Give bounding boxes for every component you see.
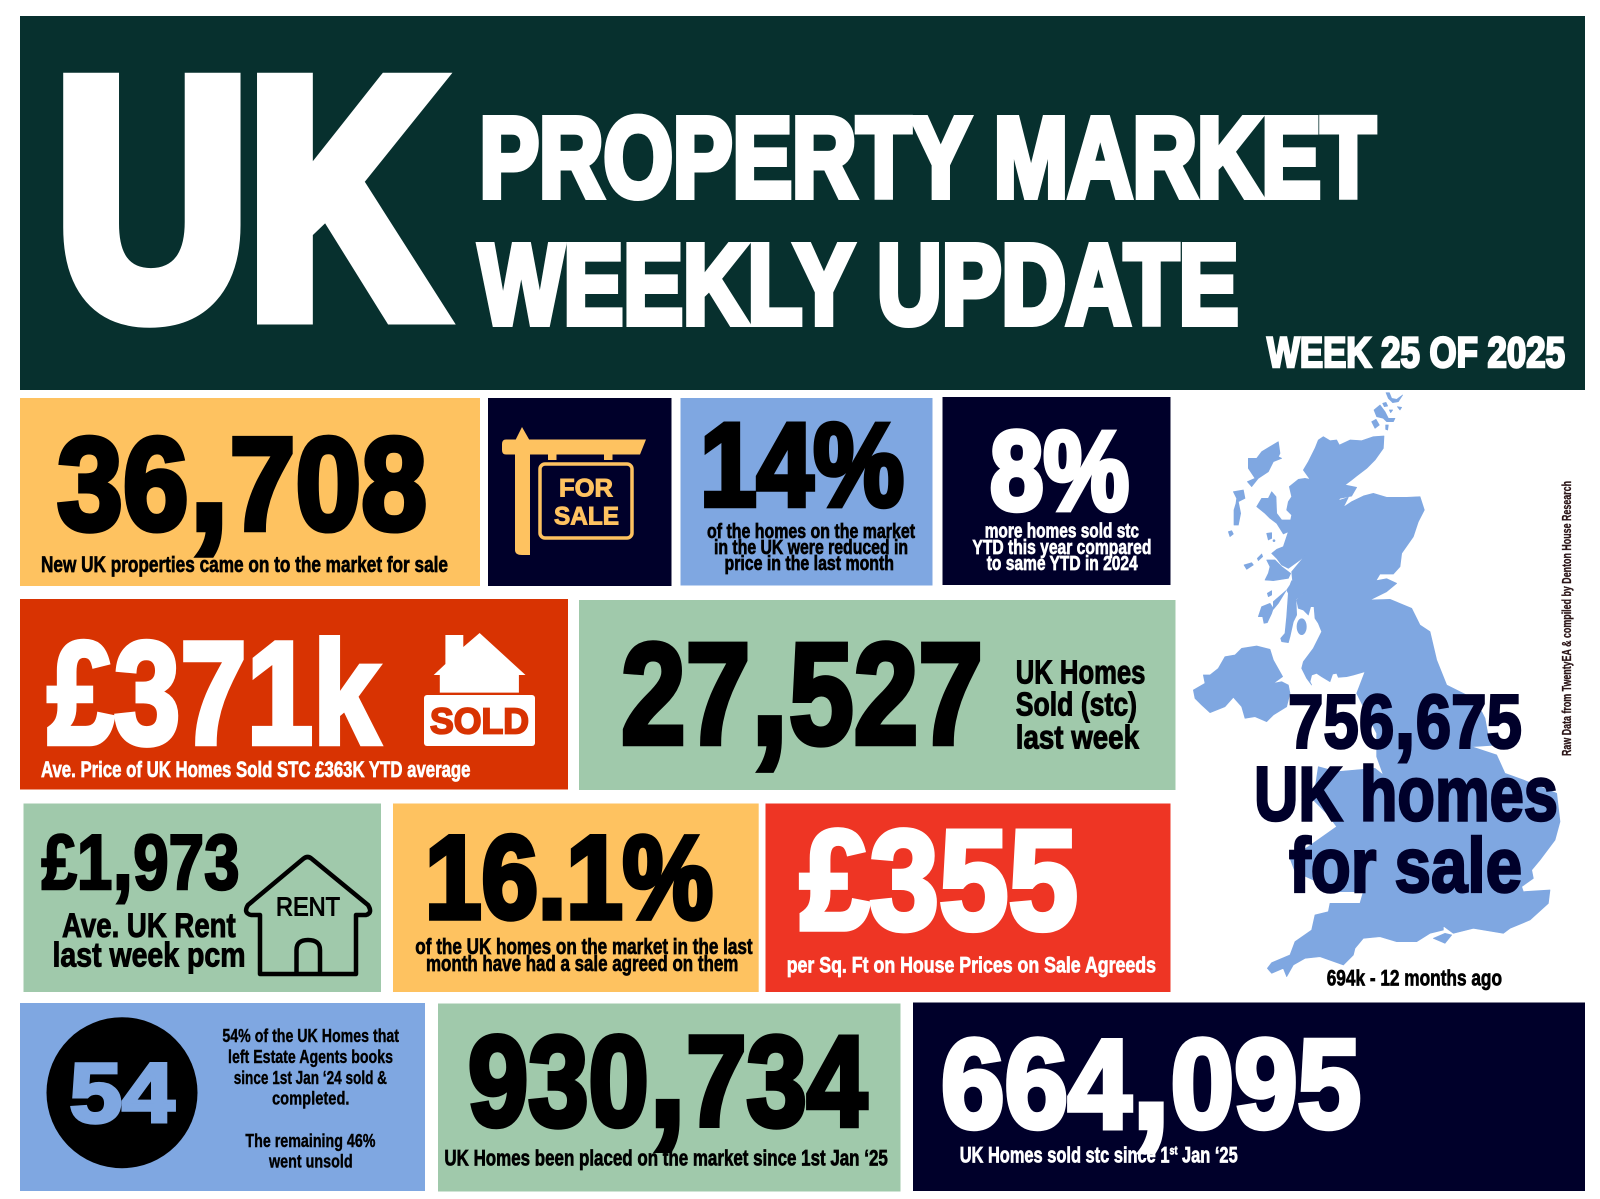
panel: homes placed on market [438, 980, 900, 1192]
icon: for sale sign [502, 427, 646, 555]
caption: Ave. UK Rent [62, 907, 236, 945]
number: £1,973: £1,973 [42, 807, 240, 909]
number: 8%: 8% [990, 408, 1129, 534]
caption: Jan ‘25 [1177, 1143, 1238, 1168]
panel: 54 percent completed [20, 1003, 425, 1191]
title: property market: PROPERTY MARKET [480, 94, 1376, 220]
body text: left Estate Agents books [228, 1047, 393, 1067]
caption [972, 521, 1151, 575]
icon: sold house [424, 633, 535, 746]
body text [222, 1026, 399, 1172]
panel: sale agreed [393, 804, 759, 992]
number: 930,734: 930,734 [468, 980, 867, 1160]
body text: 54% of the UK Homes that [222, 1026, 399, 1046]
caption: YTD this year compared [972, 537, 1151, 559]
caption: more homes sold stc [985, 521, 1139, 543]
caption: per Sq. Ft on House Prices on Sale Agreeds [787, 952, 1156, 978]
number: £371k: £371k [48, 612, 380, 774]
number: 14%: 14% [700, 400, 904, 532]
caption [415, 934, 753, 976]
caption: Ave. Price of UK Homes Sold STC £363K YTD average [41, 757, 470, 782]
panel: 8 percent more sold [942, 397, 1170, 585]
caption: price in the last month [724, 553, 894, 575]
caption: UK Homes sold stc since 1 [960, 1143, 1241, 1168]
icon: for sale sign: FOR [559, 474, 613, 502]
label: UK Homes [1016, 653, 1145, 690]
caption: UK Homes been placed on the market since 1st Jan ‘25 [444, 1146, 888, 1171]
badge: 54 [46, 1017, 198, 1168]
label: last week [1016, 718, 1140, 756]
caption: st [1170, 1144, 1177, 1158]
caption [52, 907, 246, 975]
caption: New UK properties came on to the market for sale [41, 552, 448, 577]
panel: homes sold since January [913, 988, 1585, 1191]
caption: year ago: 694k - 12 months ago [1327, 966, 1502, 991]
header banner [20, 12, 1585, 390]
title: UK: UK [56, 12, 440, 384]
caption: of the homes on the market [707, 521, 915, 543]
body text: went unsold [268, 1152, 353, 1172]
title: weekly update: WEEKLY UPDATE [479, 222, 1238, 348]
icon: sold house: SOLD [430, 700, 529, 742]
label: Sold (stc) [1016, 686, 1137, 723]
number: 27,527: 27,527 [621, 588, 983, 780]
caption: last week pcm [52, 937, 246, 975]
number: 664,095: 664,095 [941, 988, 1361, 1162]
label [1016, 653, 1145, 756]
body text: completed. [272, 1088, 350, 1108]
number: 36,708: 36,708 [57, 380, 427, 564]
icon: rent house [246, 857, 370, 974]
caption [707, 521, 915, 575]
panel: 14 percent reduced [680, 398, 932, 586]
map panel: homes for sale [1193, 393, 1560, 991]
headline: for sale: for sale [1289, 823, 1522, 909]
source note: Raw Data from TwentyEA & compiled by Denton House Research [1559, 481, 1574, 756]
body text: The remaining 46% [245, 1131, 376, 1151]
number: £355: £355 [800, 801, 1078, 960]
panel: new properties [20, 380, 480, 586]
caption: month have had a sale agreed on them [426, 951, 738, 976]
panel: average price [20, 599, 568, 790]
headline: 756,675: 756,675 [1288, 666, 1522, 768]
panel: price per square foot [766, 801, 1170, 992]
panel: for sale icon [488, 398, 672, 586]
caption: of the UK homes on the market in the last [415, 934, 753, 959]
caption: to same YTD in 2024 [987, 553, 1138, 575]
body text: since 1st Jan ‘24 sold & [234, 1068, 387, 1088]
panel: homes sold last week [579, 588, 1176, 790]
panel: average rent [24, 804, 381, 992]
badge: 54: 54 [70, 1046, 175, 1140]
number: 16.1%: 16.1% [425, 812, 713, 944]
icon: for sale sign: SALE [554, 502, 619, 530]
caption: in the UK were reduced in [714, 537, 908, 559]
icon: rent house: RENT [276, 892, 340, 922]
map: United Kingdom [1193, 393, 1560, 977]
